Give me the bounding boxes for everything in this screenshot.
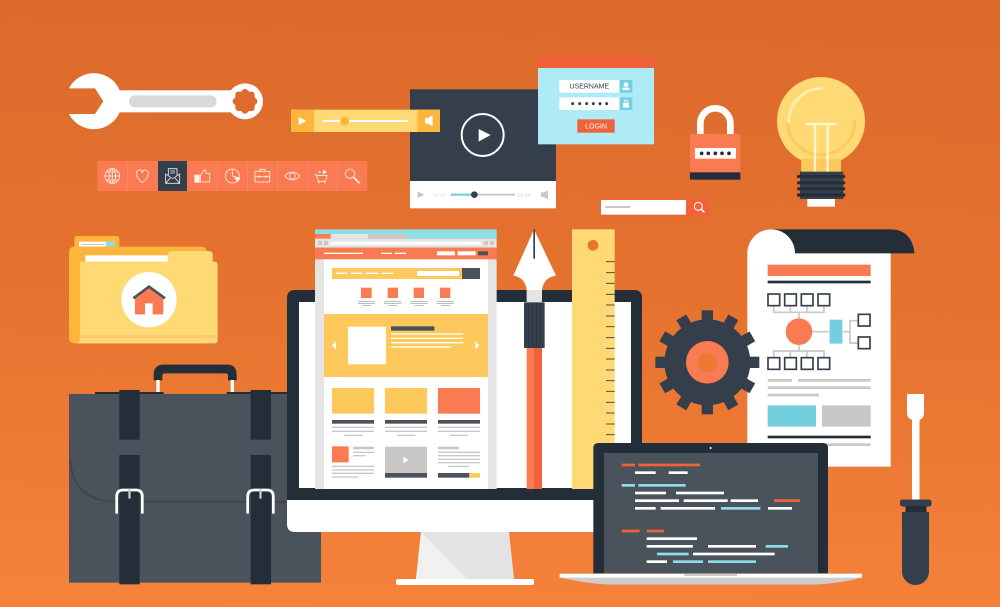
browser web page mockup [315,229,497,489]
login panel: LOGIN [585,123,607,130]
search box [601,198,709,217]
login panel [538,55,654,144]
icon: padlock [690,108,740,180]
desktop monitor [287,290,642,585]
icon: folder with home [69,236,218,343]
video player [410,89,556,208]
briefcase [69,365,321,584]
video player: 01:17 [434,192,446,198]
icon toolbar [97,161,367,191]
video player: 03:48 [518,192,531,198]
document with flow chart [747,229,915,467]
icon: screwdriver [900,394,932,585]
icon: light bulb [777,77,865,207]
ruler [572,229,615,489]
audio player bar [291,110,440,132]
icon: fountain pen [513,229,556,489]
icon: wrench [69,73,263,129]
icon: gear [655,310,759,414]
login panel: USERNAME [570,84,609,91]
laptop with code [560,443,862,585]
